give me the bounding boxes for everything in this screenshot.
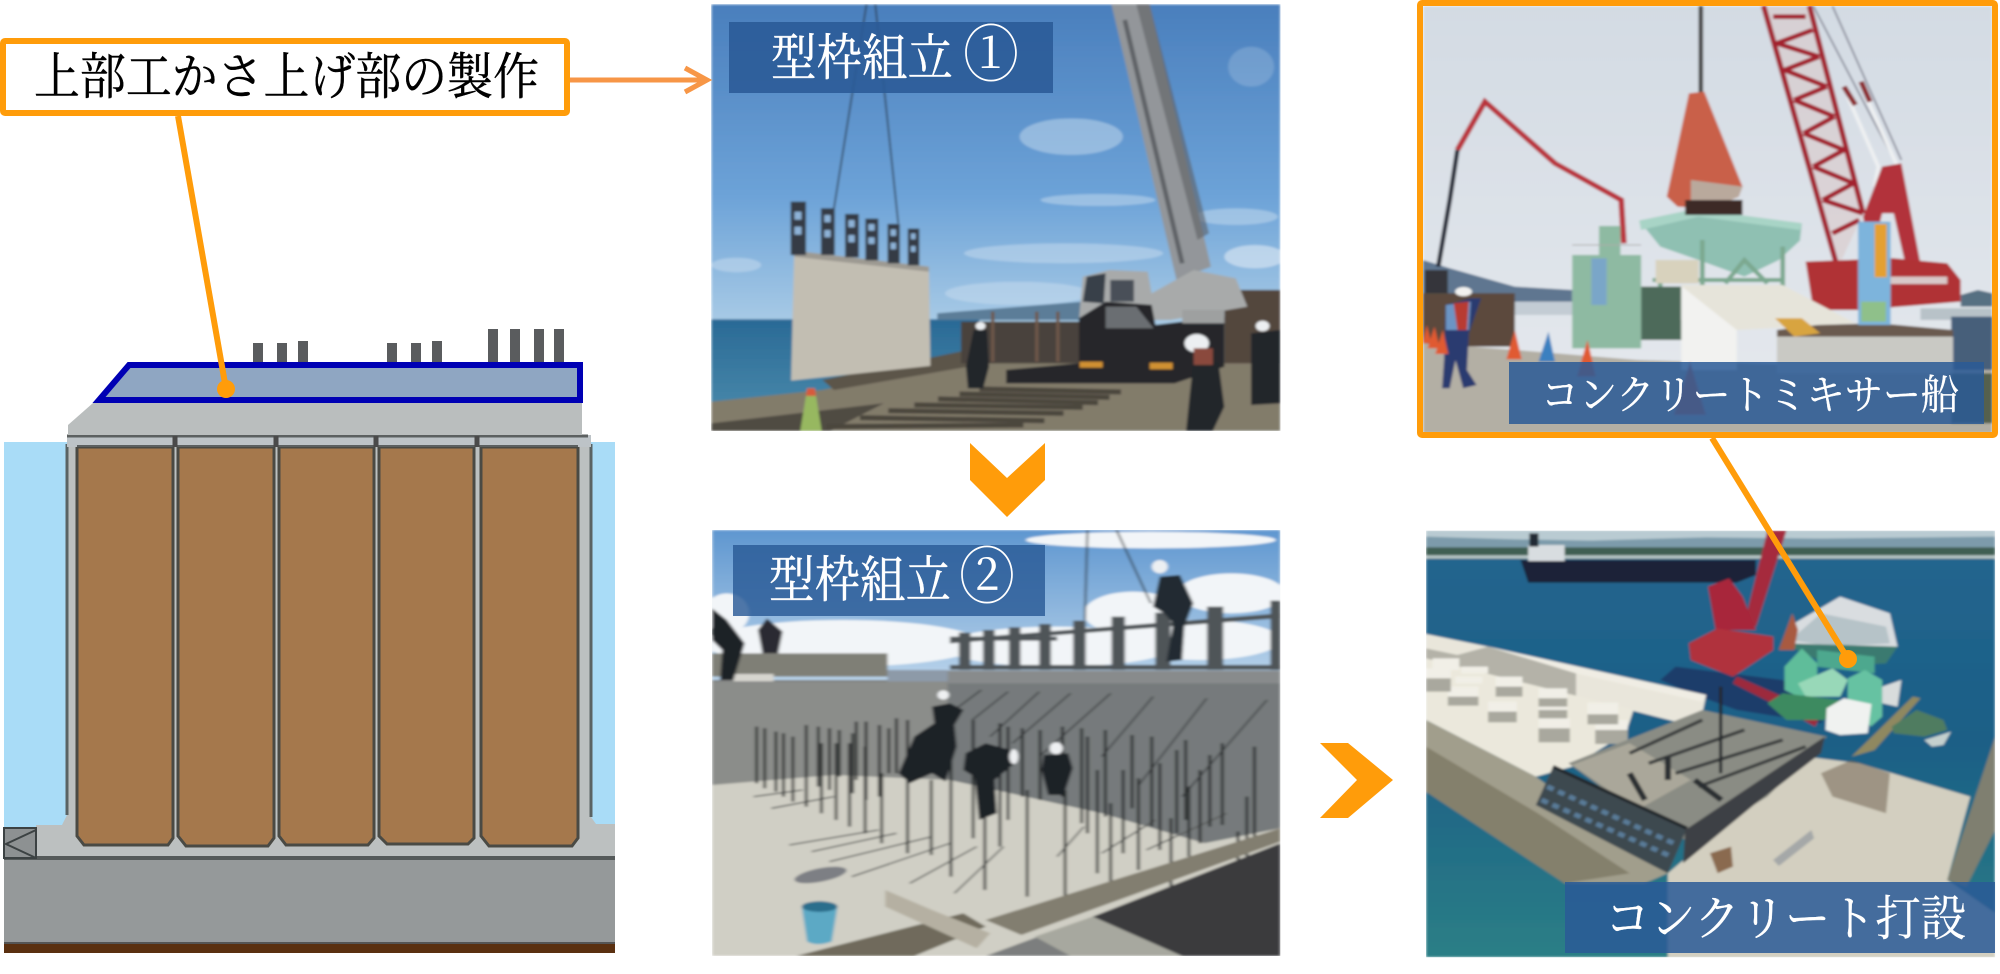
water: [4, 442, 615, 827]
hopper plant: [1639, 209, 1802, 340]
quay ground: [711, 360, 1280, 431]
label: formwork 1: ①: [963, 22, 1019, 90]
tanker: [1521, 533, 1756, 583]
clouds: [704, 532, 1285, 667]
steel sleepers: [826, 389, 1121, 427]
main concrete deck: [1668, 757, 1995, 957]
photo 2: rebar and formwork: [704, 530, 1285, 956]
green silo: [1572, 226, 1641, 348]
crane boom foreground: [1947, 737, 1995, 887]
photo 1: formwork assembly crane lift: [711, 4, 1286, 431]
chevron arrow right: [1320, 743, 1393, 818]
rebar formwork area: [1536, 687, 1827, 873]
label: formwork 2: [733, 544, 1045, 616]
reinforcing bars: [253, 329, 564, 363]
right clutter: [1951, 317, 1992, 373]
label: concrete mixer ship: コンクリートミキサー船: [1541, 372, 1959, 418]
photo 3: concrete mixer ship: [1420, 3, 1995, 435]
workers in pit: [899, 703, 1073, 820]
leader line: raised section: [178, 116, 235, 398]
base tone: [712, 678, 1280, 956]
far site clutter: [1423, 293, 1515, 347]
concrete pump boom: [1438, 102, 1624, 267]
panel lugs: [791, 202, 919, 265]
sky: [711, 4, 1280, 326]
wood stack: [822, 350, 968, 390]
photo frame: [1420, 3, 1995, 435]
workers: [966, 330, 1280, 431]
blue bucket: [802, 901, 837, 944]
arrow to formwork photo: [570, 68, 707, 92]
right wall: [948, 671, 1280, 843]
label: formwork 2: ②: [959, 544, 1015, 612]
sky: [1423, 6, 1992, 362]
callout box: 上部工かさ上げ部の製作: [34, 49, 539, 105]
traffic cones: [1423, 325, 1706, 415]
white shed: [1681, 285, 1855, 370]
safety banner: [1858, 222, 1891, 325]
label: formwork 2: 型枠組立: [769, 552, 951, 608]
caisson body and foot slab: [4, 436, 615, 858]
photo 4: concrete placement aerial: [1426, 531, 1995, 957]
far shore: [1426, 531, 1995, 559]
railing lugs: [950, 601, 1280, 670]
cargo floating barge: [1660, 667, 1829, 723]
slings: [834, 4, 898, 223]
label: formwork 1: [729, 22, 1053, 93]
breakwater top wall: [1426, 634, 1706, 722]
pit and beam: [1093, 843, 1280, 956]
chevron arrow down: [970, 443, 1045, 517]
worker on railing: [1152, 560, 1193, 662]
hanging ropes: [1085, 530, 1151, 620]
green tanks: [1767, 648, 1882, 727]
workers on far deck: [712, 608, 745, 680]
crane hull: [1806, 258, 1961, 310]
wave-dissipating block: [4, 828, 36, 858]
ground: [1423, 343, 1992, 433]
clouds: [711, 47, 1286, 305]
standing rebars: [757, 718, 1254, 920]
boom pendants: [1848, 97, 1898, 187]
hills: [1423, 260, 1572, 310]
sky: [712, 530, 1280, 680]
formwork stacks: [961, 322, 1083, 363]
diagonal wall ties: [950, 690, 1267, 797]
clamshell grab: [1667, 6, 1743, 215]
small boats and gangway: [1852, 680, 1951, 757]
red crane: [1689, 531, 1821, 727]
caisson cells: [77, 447, 578, 846]
site cabin: [1775, 318, 1953, 373]
raised superstructure section: [99, 365, 580, 400]
base mound: [4, 859, 615, 944]
breakwater white deck: [1426, 658, 1633, 777]
label: concrete mixer ship: [1509, 362, 1984, 424]
crane A-frame: [1863, 163, 1920, 263]
floor: [712, 775, 1280, 956]
label: formwork 1: 型枠組立: [771, 30, 953, 86]
worker: [1442, 287, 1481, 388]
sea: [711, 319, 979, 403]
cap strip: [67, 435, 591, 447]
left wall: [712, 682, 948, 785]
crane truck upper body: [1079, 270, 1247, 320]
superstructure: [68, 403, 582, 435]
traffic cone: [800, 388, 822, 431]
floor shadows: [754, 790, 1227, 893]
cross-section diagram: [4, 329, 615, 953]
caisson walls outline: [67, 444, 591, 817]
tug boat: [1779, 597, 1898, 667]
crane boom: [1111, 4, 1211, 280]
far stacked structure: [712, 653, 887, 677]
leader line: mixer ship: [1712, 438, 1857, 668]
crane truck lower body: [1006, 302, 1224, 383]
lattice crane boom: [1764, 6, 1901, 263]
deck equipment: [1821, 760, 1890, 813]
label: concrete placing: [1565, 882, 1995, 953]
water: [1426, 531, 1995, 957]
label: concrete placing: コンクリート打設: [1605, 893, 1966, 946]
seaward slope face: [1426, 720, 1668, 883]
concrete panel: [791, 251, 930, 381]
concrete blocks: [1426, 658, 1628, 730]
white plant cabin: [1826, 698, 1871, 735]
